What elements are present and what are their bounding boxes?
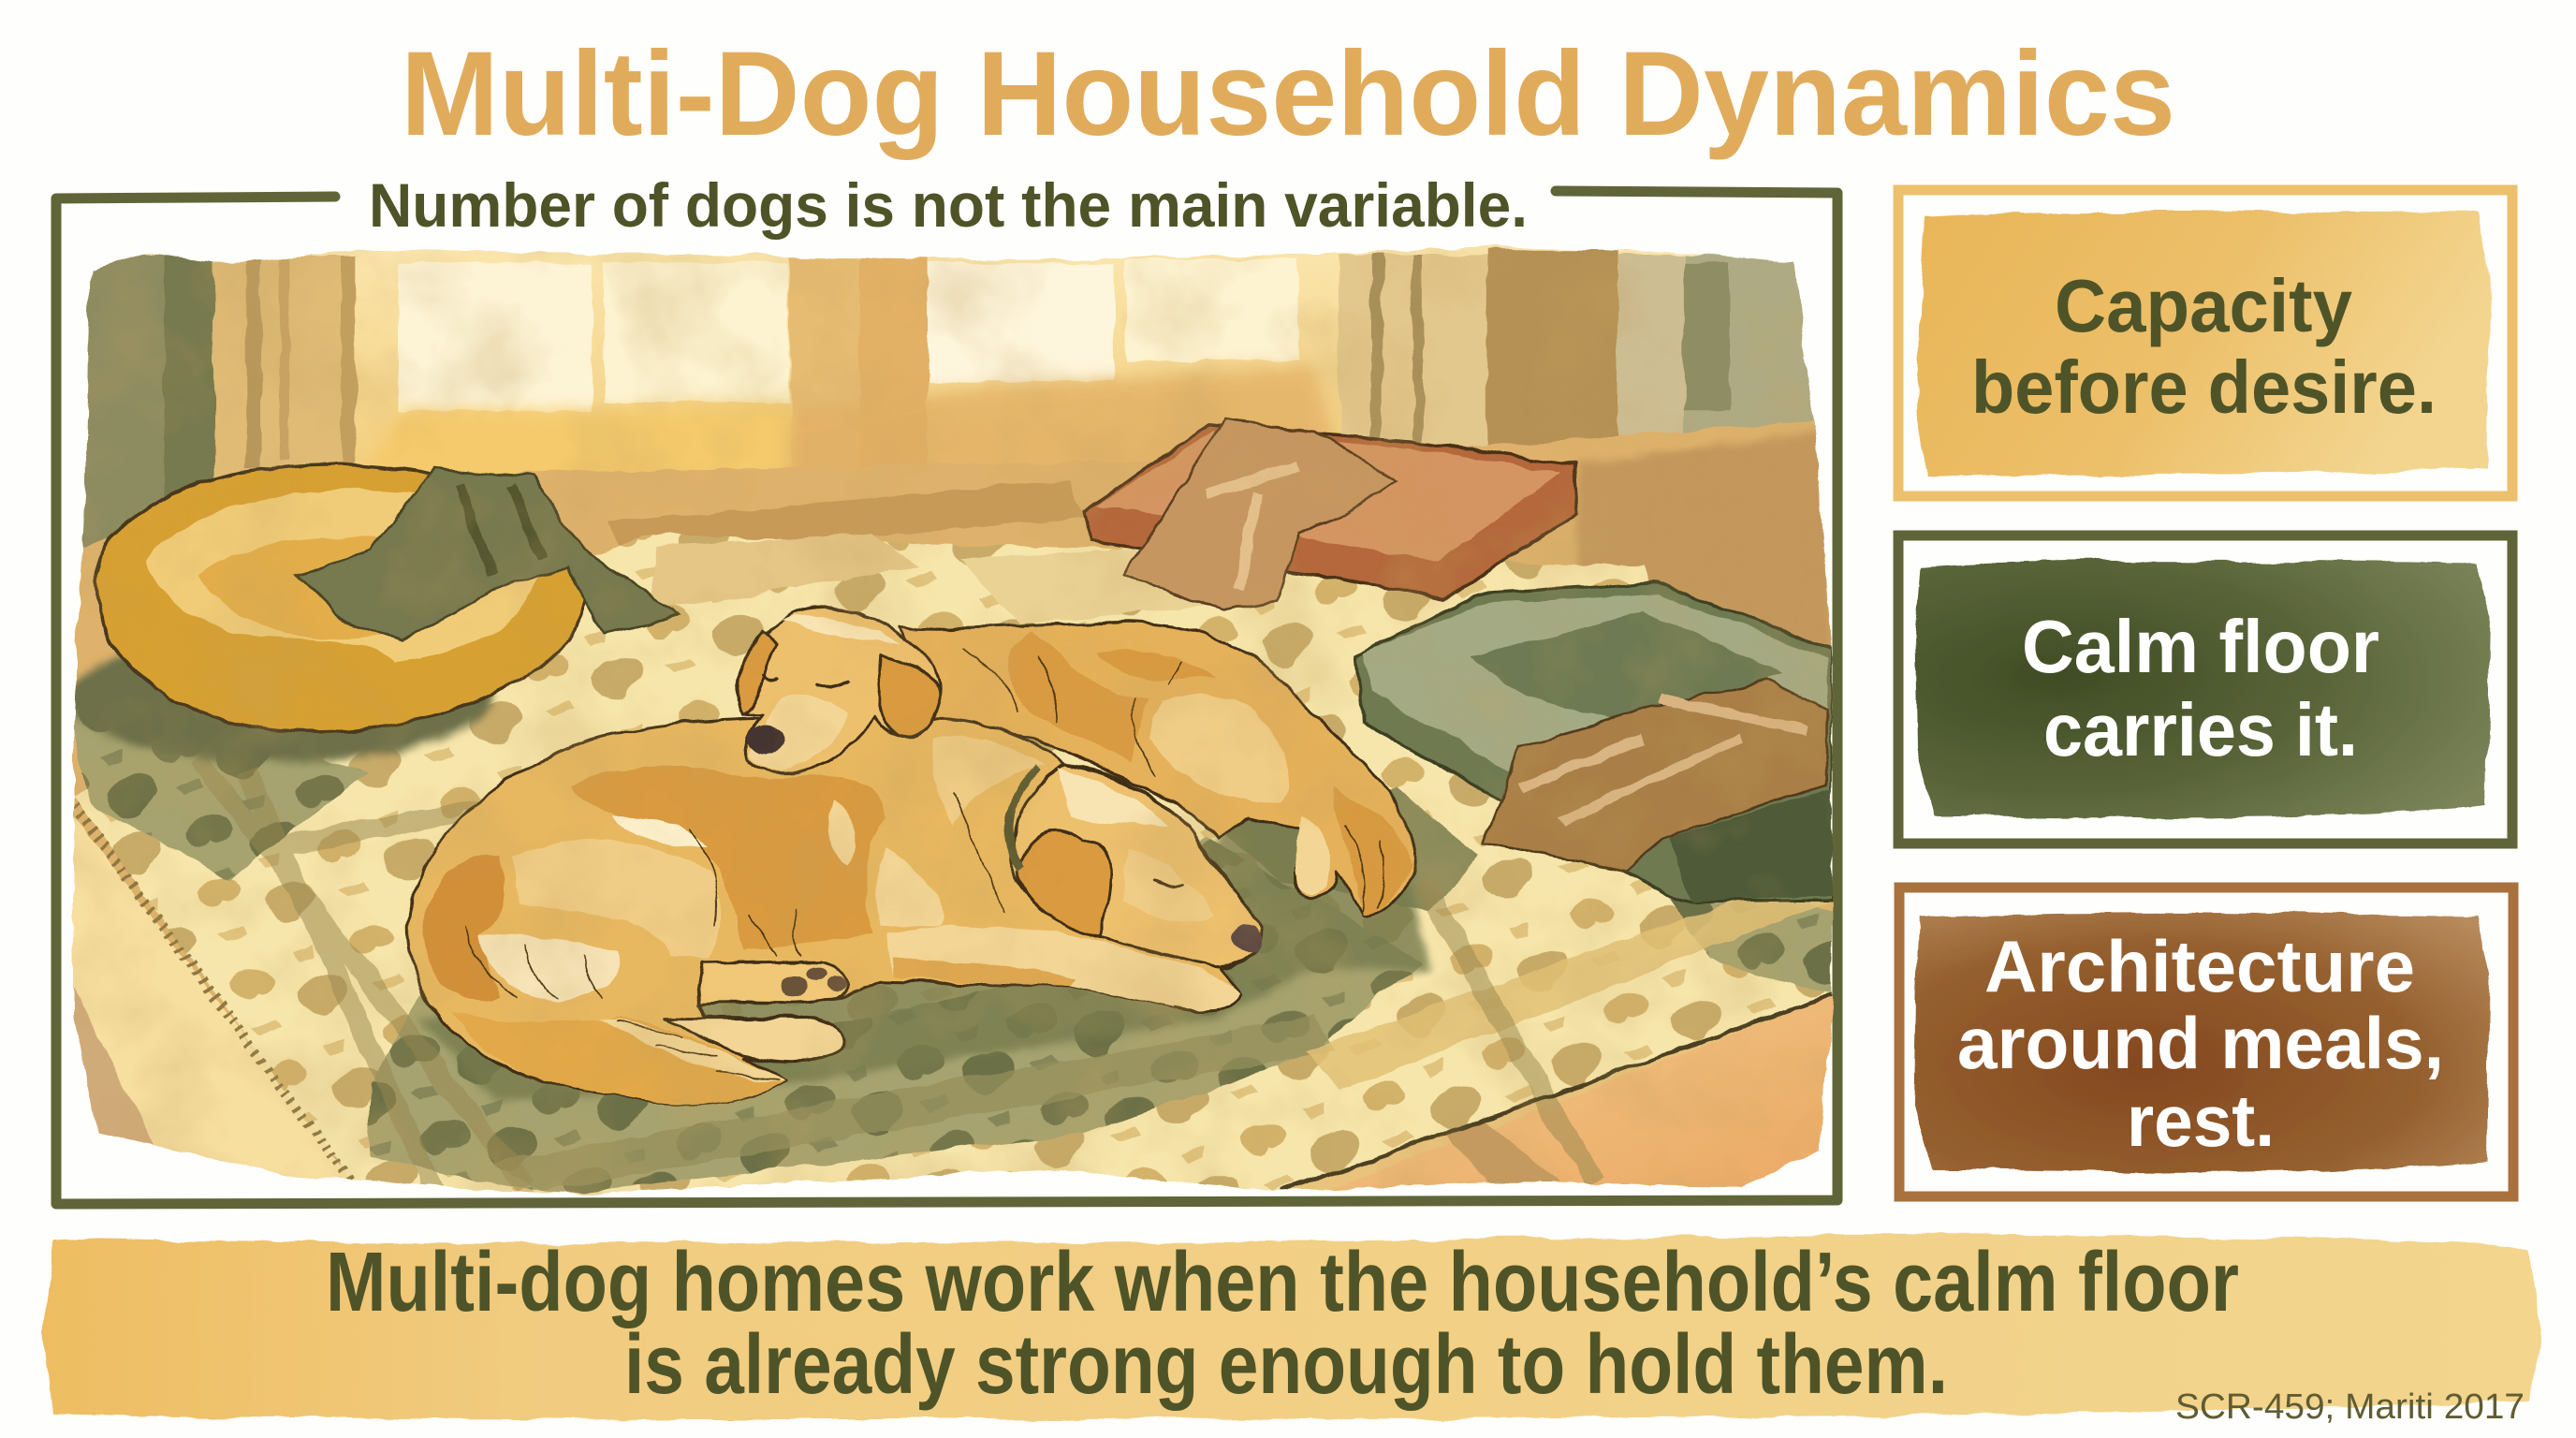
panel wash — [1915, 561, 2490, 817]
foreleg — [886, 926, 1241, 1011]
banner: takeaway — [43, 1235, 2542, 1427]
right curtains — [1339, 250, 1815, 460]
front dog — [407, 717, 1261, 1105]
source note: SCR-459; Mariti 2017 — [2175, 1387, 2525, 1427]
banner text: Multi-dog homes work when the household’s calm floor — [326, 1236, 2239, 1329]
panel text: around meals, — [1957, 1002, 2444, 1084]
panel wash — [1917, 212, 2490, 477]
banner wash — [43, 1235, 2542, 1419]
panel text: before desire. — [1971, 345, 2437, 429]
title: Multi-Dog Household Dynamics — [401, 27, 2175, 161]
panel border — [1899, 888, 2513, 1196]
panel border — [1898, 536, 2512, 844]
rear paw — [664, 1018, 843, 1061]
frame border — [56, 191, 1837, 1204]
panel text: Architecture — [1984, 925, 2415, 1007]
green cushion with brown blanket — [1355, 583, 1832, 901]
terracotta cushion with tan blanket — [1084, 419, 1577, 611]
head — [1012, 766, 1261, 969]
tail — [453, 1014, 788, 1105]
collar — [1010, 769, 1038, 870]
paw with pads — [696, 961, 849, 1004]
panel: calm floor carries it — [1898, 536, 2512, 844]
watercolor mottling — [66, 238, 1840, 1208]
left curtains — [79, 255, 357, 550]
back dog body — [900, 622, 1415, 916]
banner text: is already strong enough to hold them. — [624, 1318, 1948, 1412]
panel border — [1898, 190, 2512, 496]
panel: illustration frame — [56, 170, 1840, 1208]
panel text: carries it. — [2043, 688, 2358, 771]
back dog head — [739, 609, 941, 774]
illustration: two golden retrievers resting on a rug — [66, 238, 1840, 1208]
panel wash — [1915, 912, 2490, 1172]
panel: capacity before desire — [1898, 190, 2512, 496]
yellow round bed with olive throw — [66, 464, 677, 761]
rug — [69, 534, 1840, 1208]
wall and windows — [66, 238, 1840, 550]
panel text: Capacity — [2055, 264, 2352, 347]
panel: architecture around meals, rest — [1899, 888, 2513, 1196]
panel text: Calm floor — [2022, 605, 2379, 688]
shadow under dogs — [418, 820, 1436, 1105]
frame caption: Number of dogs is not the main variable. — [369, 170, 1528, 240]
floor — [66, 419, 1840, 1208]
panel text: rest. — [2127, 1079, 2275, 1162]
